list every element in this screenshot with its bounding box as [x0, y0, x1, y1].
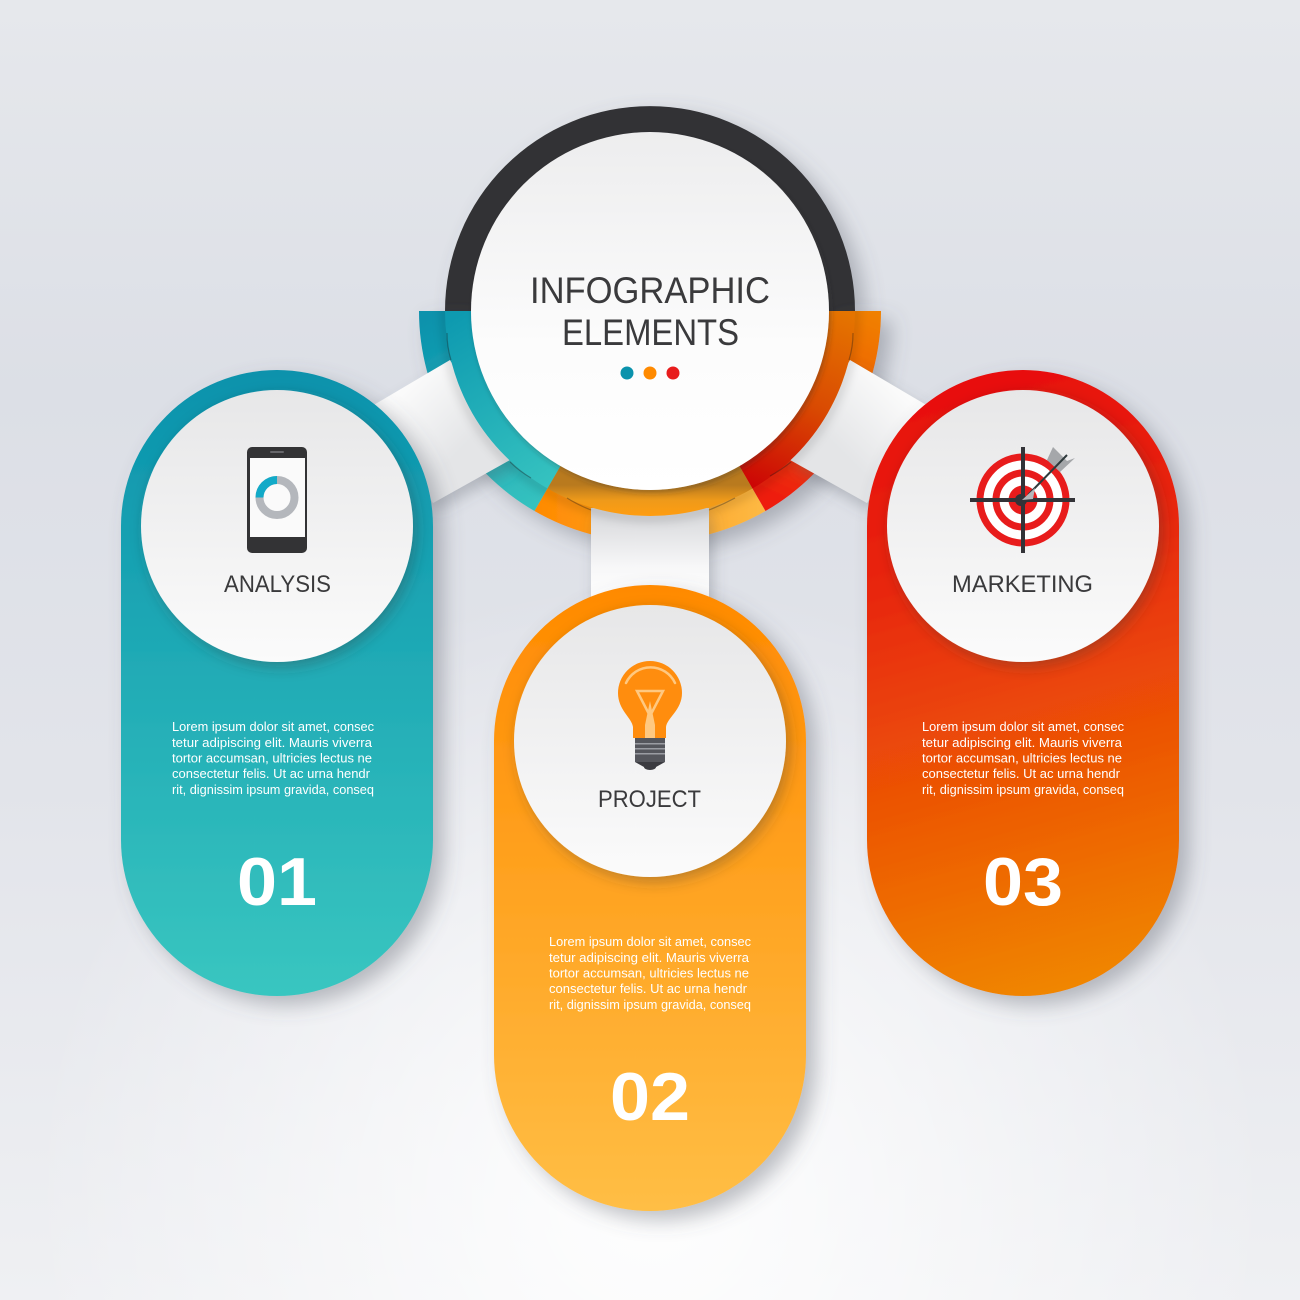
outer coloured ring segments: [419, 311, 881, 542]
panel: 01 analysis: [121, 370, 433, 996]
panel: 03 marketing: [867, 370, 1179, 996]
pill: [494, 585, 806, 1211]
body text: tortor accumsan, ultricies lectus ne: [922, 750, 1122, 766]
title: INFOGRAPHIC: [530, 270, 770, 311]
label: MARKETING: [952, 571, 1093, 598]
body text: consectetur felis. Ut ac urna hendr: [549, 981, 748, 996]
body text: tortor accumsan, ultricies lectus ne: [172, 750, 372, 766]
central circle: [471, 132, 829, 490]
band shadow: [440, 311, 862, 524]
disc: [471, 132, 829, 490]
panel: 02 project: [494, 585, 806, 1211]
connector: left: [372, 360, 510, 503]
pill: [121, 370, 433, 996]
title: [530, 270, 770, 353]
disc: [514, 605, 786, 877]
body text: Lorem ipsum dolor sit amet, consec: [172, 719, 374, 734]
pill: [867, 370, 1179, 996]
body text: tortor accumsan, ultricies lectus ne: [549, 966, 749, 980]
three dots: [620, 366, 680, 380]
connector: bottom: [591, 508, 709, 598]
body text: [549, 934, 751, 1012]
band segment: teal: [445, 311, 560, 488]
icon: smartphone with donut chart: [247, 447, 307, 553]
body text: tetur adipiscing elit. Mauris viverra: [549, 950, 750, 965]
disc: [887, 390, 1159, 662]
body text: rit, dignissim ipsum gravida, conseq: [549, 997, 751, 1012]
icon: target with arrow: [970, 447, 1075, 553]
body text: Lorem ipsum dolor sit amet, consec: [549, 934, 751, 949]
ring segment: orange: [534, 466, 766, 542]
band creases: [447, 333, 853, 510]
body text: consectetur felis. Ut ac urna hendr: [922, 766, 1121, 781]
band segment: red: [740, 311, 855, 488]
inner coloured band: [440, 311, 862, 524]
body text: rit, dignissim ipsum gravida, conseq: [172, 782, 374, 797]
number: 02: [610, 1059, 690, 1135]
body text: consectetur felis. Ut ac urna hendr: [172, 766, 371, 781]
icon: light bulb: [618, 661, 682, 770]
body text: Lorem ipsum dolor sit amet, consec: [922, 719, 1124, 734]
label: PROJECT: [598, 786, 701, 813]
ring segment: red: [740, 311, 881, 511]
body text: tetur adipiscing elit. Mauris viverra: [172, 735, 373, 750]
dark top ring of central circle: [445, 106, 855, 311]
number: 01: [237, 844, 317, 920]
connector: right: [790, 360, 928, 503]
body text: [922, 719, 1124, 797]
ring segment: teal: [419, 311, 560, 511]
body text: [172, 719, 374, 797]
body text: tetur adipiscing elit. Mauris viverra: [922, 735, 1123, 750]
body text: rit, dignissim ipsum gravida, conseq: [922, 782, 1124, 797]
label: ANALYSIS: [224, 571, 331, 598]
title: ELEMENTS: [562, 312, 739, 353]
number: 03: [983, 844, 1063, 920]
band segment: orange: [548, 466, 752, 516]
disc: [141, 390, 413, 662]
